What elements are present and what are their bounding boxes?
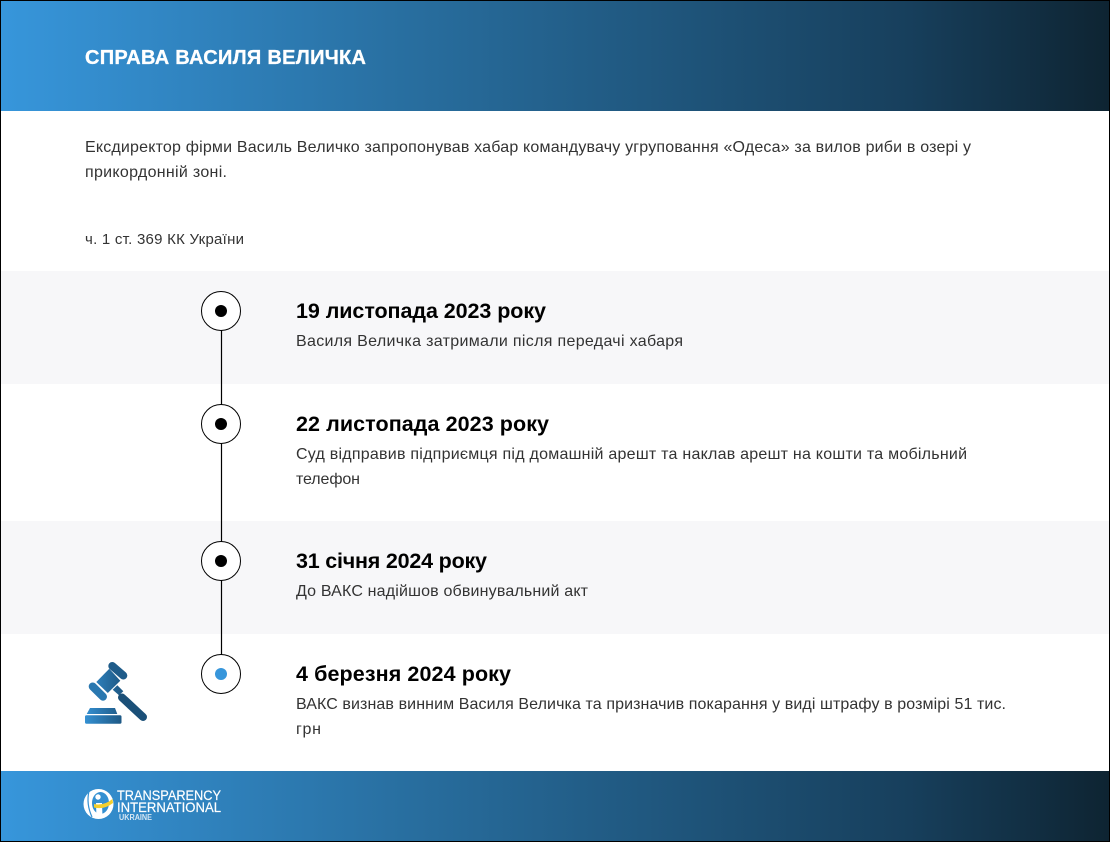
timeline entry 4: ВАКС визнав винним Василя Величка та призначив покарання у виді штрафу в розмірі 51 тис.: [296, 696, 1006, 713]
timeline entry 2: [296, 412, 967, 488]
timeline entry 2: Суд відправив підприємця під домашній арешт та наклав арешт на кошти та мобільний: [296, 446, 967, 463]
logo: Transparency International Ukraine: UKRAINE: [119, 813, 153, 822]
timeline entry 2: телефон: [296, 471, 360, 488]
intro text: прикордонній зоні.: [85, 164, 227, 181]
timeline entry 3: 31 січня 2024 року: [296, 549, 487, 573]
logo: Transparency International Ukraine: INTERNATIONAL: [117, 799, 221, 815]
logo: Transparency International Ukraine: [84, 787, 222, 822]
timeline entry 4: 4 березня 2024 року: [296, 662, 511, 686]
timeline line: [220, 330, 222, 655]
timeline entry 2: 22 листопада 2023 року: [296, 412, 549, 436]
intro text: Ексдиректор фірми Василь Величко запропонував хабар командувачу угруповання «Одеса» за вилов риби в озері у: [85, 139, 971, 156]
timeline marker 4: [202, 654, 240, 694]
timeline entry 1: 19 листопада 2023 року: [296, 299, 546, 323]
timeline entry 4: грн: [296, 721, 321, 738]
timeline marker 3: [202, 542, 240, 580]
footer bar: [1, 771, 1109, 841]
timeline marker 2: [202, 404, 240, 444]
logo: Transparency International Ukraine: TRANSPARENCY: [117, 787, 222, 803]
row background: 19 November: [1, 271, 1109, 384]
timeline marker 1: [202, 292, 240, 330]
timeline entry 4: [296, 662, 1006, 738]
timeline entry 3: До ВАКС надійшов обвинувальний акт: [296, 583, 589, 600]
icon: gavel: [85, 666, 143, 724]
row background: 31 January: [1, 521, 1109, 634]
legal article reference: ч. 1 ст. 369 КК України: [85, 231, 244, 248]
title: СПРАВА ВАСИЛЯ ВЕЛИЧКА: [85, 47, 366, 69]
timeline entry 3: [296, 549, 589, 600]
timeline entry 1: Василя Величка затримали після передачі хабаря: [296, 333, 683, 350]
header bar: [1, 1, 1109, 111]
timeline entry 1: [296, 299, 683, 350]
